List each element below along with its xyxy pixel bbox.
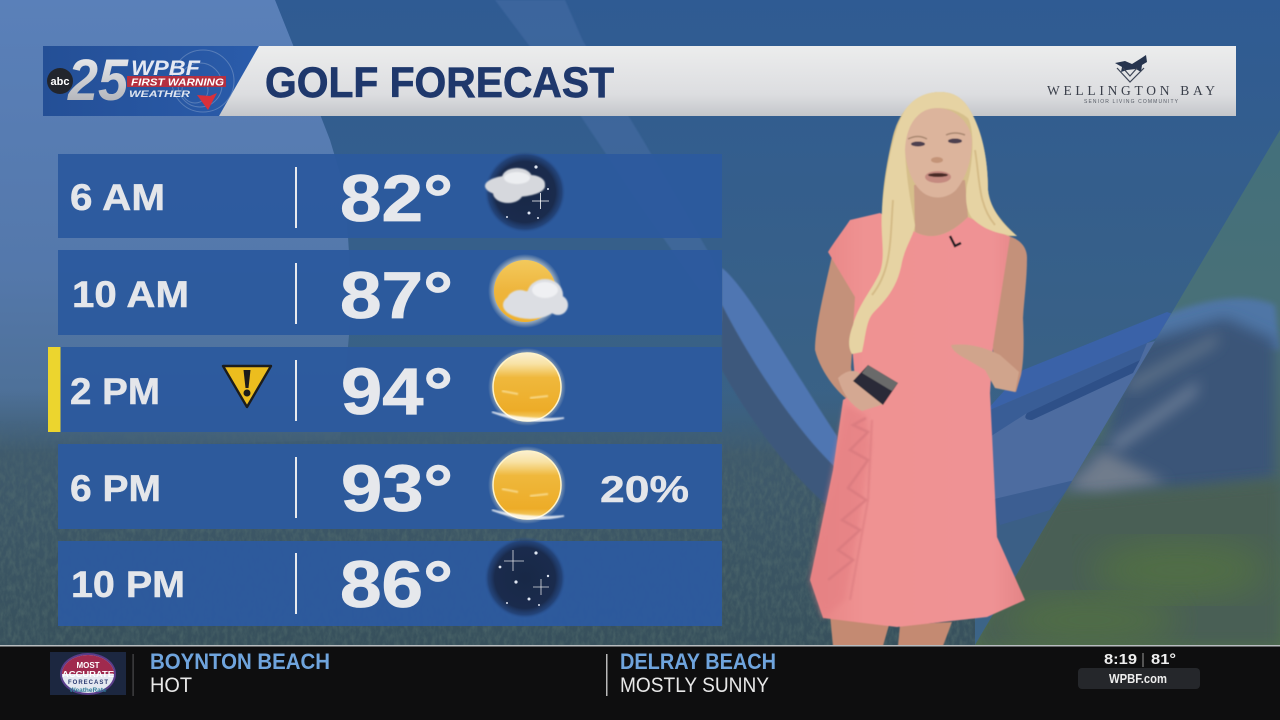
presenter: dress [810,213,1025,627]
ticker: time and temperature [1104,651,1176,668]
background: club head [990,312,1171,525]
lower-third ticker [0,645,1280,720]
header bar [43,46,1236,116]
header: station logo [43,46,259,116]
ticker: Delray Beach forecast: MOSTLY SUNNY [620,674,769,697]
row: 10 PM: 10 PM [71,564,185,605]
icon: sun [488,446,566,524]
presenter: hair front [849,92,1017,354]
ticker: time and temperature: 8:19 [1104,651,1137,668]
row: 10 PM [58,537,722,626]
presenter: microphone [950,236,961,246]
ticker: Boynton Beach forecast: BOYNTON BEACH [150,649,330,674]
row: 6 AM: 6 AM [70,177,165,218]
ticker: most accurate forecast badge: WeatheRate [69,687,107,694]
yellow alert bar [48,347,60,432]
row: 6 AM [58,151,722,238]
presenter: eyes, nose and mouth [908,133,965,183]
icon: partly cloudy night [484,151,566,233]
background: club hosel [722,268,842,480]
ticker: Boynton Beach forecast: HOT [150,674,192,697]
row: 2 PM [48,347,722,432]
ticker: most accurate forecast badge [50,652,126,695]
header: station logo: WEATHER [129,89,190,100]
sponsor logo: Wellington Bay: SENIOR LIVING COMMUNITY [1084,99,1179,105]
row: 2 PM: 2 PM [70,371,160,412]
row: 10 PM: 86° [340,547,453,621]
presenter: neck [914,180,968,236]
title: GOLF FORECAST [265,59,614,107]
precipitation chance: 20% [600,469,689,510]
presenter: dress ruffle [810,405,872,618]
presenter: legs [830,615,952,646]
row: 6 PM: 93° [341,451,453,525]
presenter: hair back [882,92,1017,240]
background: grass [0,390,975,646]
sponsor logo: Wellington Bay [1047,55,1215,105]
icon: sun [488,348,566,426]
forecast rows [48,151,722,626]
ticker: Boynton Beach forecast [150,649,330,697]
row: 10 AM [58,250,722,335]
presenter: gesturing hand [951,344,1019,392]
ticker: Delray Beach forecast [620,649,776,697]
header: light title band [43,46,1236,116]
ticker: most accurate forecast badge: ACCURATE [62,670,115,679]
ticker: Delray Beach forecast: DELRAY BEACH [620,649,776,674]
ticker: most accurate forecast badge: MOST [76,661,100,670]
header: station logo: WPBF [131,57,201,80]
presenter [810,92,1027,646]
row: 6 PM [58,444,722,529]
icon: heat warning triangle [223,366,271,407]
row: 6 AM: 82° [340,161,453,235]
row: 10 AM: 87° [340,258,453,332]
header: station logo: abc [51,76,69,88]
row: 6 PM: 6 PM [70,468,161,509]
background: glove and ball shape [0,0,352,450]
ticker: most accurate forecast badge: FORECAST [68,680,108,686]
ticker: website pill [1078,668,1200,689]
ticker: website pill: WPBF.com [1109,671,1167,686]
presenter: face [905,108,972,197]
background: club shaft [495,0,722,290]
icon: clear night [484,537,566,619]
icon: partly sunny [488,254,568,328]
header: station logo: 25 [67,48,129,113]
row: 10 AM: 10 AM [72,274,189,315]
header: station logo: FIRST WARNING [131,78,224,88]
presenter: arms [815,235,1027,405]
row: 2 PM: 94° [341,354,453,428]
ticker: time and temperature: 81° [1151,651,1176,668]
sponsor logo: Wellington Bay: WELLINGTON BAY [1047,83,1215,98]
presenter: remote in hand [838,365,898,411]
background: angled green panel [960,120,1280,650]
